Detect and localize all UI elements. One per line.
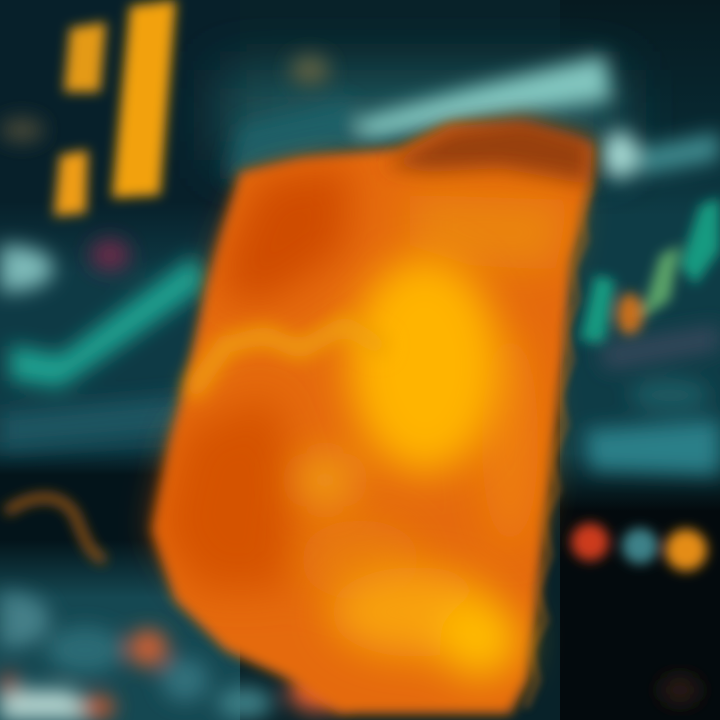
chart: orange bars top left: [54, 0, 176, 216]
chart: right green line: [580, 198, 720, 345]
chart: left brown line: [6, 498, 105, 560]
background: right column: [560, 0, 720, 720]
background: left column: [0, 0, 240, 720]
panel: top teal band: [225, 55, 720, 180]
lower right glow: [660, 676, 700, 704]
sheet: tonal patches: [160, 165, 570, 600]
indicator dots: [571, 523, 707, 571]
panel: central orange sheet: [152, 125, 592, 714]
sheet: dark top edge: [385, 118, 592, 185]
panel: lower left lights: [0, 592, 348, 720]
sheet: yellow glow: [293, 257, 520, 678]
sheet: dark wavy right edge: [526, 182, 590, 708]
panel: right teal rows: [585, 325, 720, 475]
chart: left teal line: [0, 118, 208, 450]
background: upper teal region: [220, 70, 620, 160]
sheet: yellow vein: [190, 325, 385, 395]
